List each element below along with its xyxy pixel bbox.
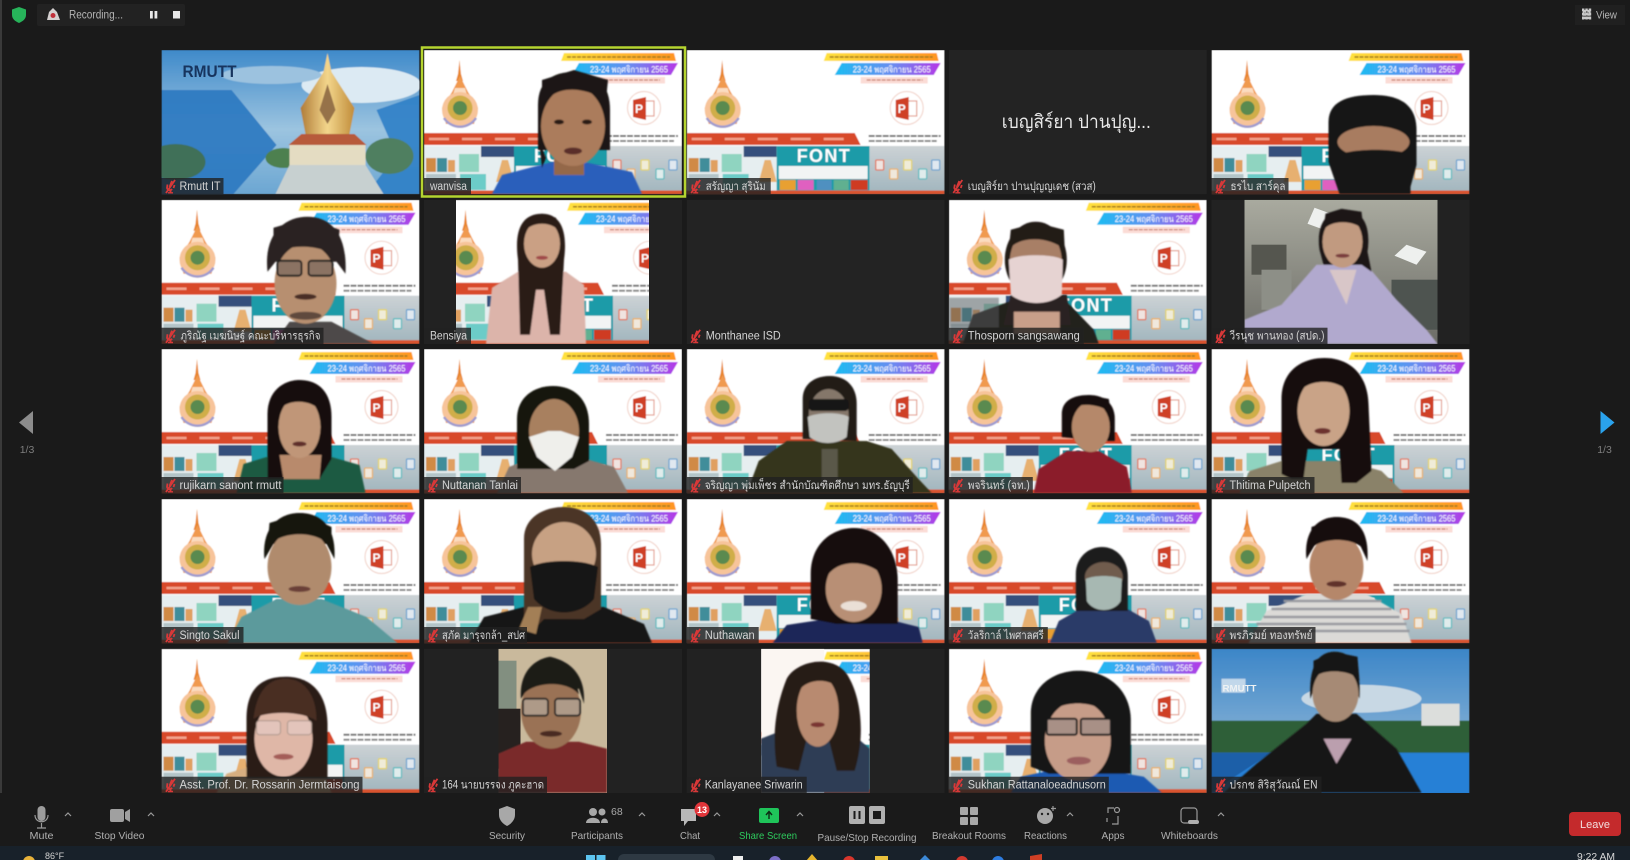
recording label: Recording... — [69, 10, 123, 22]
campus background with golden monument — [146, 50, 422, 194]
slide background — [162, 649, 420, 793]
chat button with unread badge — [680, 802, 710, 842]
name label — [949, 777, 1109, 793]
slide background — [949, 200, 1207, 344]
pillar-boxed slide and participant — [761, 648, 870, 793]
name label: ภูริณัฐ เมฆนิษฐ์ คณะบริหารธุรกิจ — [180, 329, 320, 343]
slide background — [424, 499, 682, 644]
name label — [162, 627, 244, 643]
name label: ปรกช สิริสุวัณณ์ EN — [1230, 778, 1318, 792]
name label: Monthanee ISD — [706, 331, 781, 343]
slide background — [424, 50, 682, 194]
pause and stop recording button — [818, 806, 917, 844]
tile: Thitima Pulpetch — [1212, 349, 1470, 494]
participants button: Participants — [571, 830, 623, 842]
active speaker border — [422, 48, 685, 196]
slide background — [949, 499, 1207, 644]
tile: Nuthawan — [687, 499, 945, 644]
slide background — [1212, 499, 1470, 644]
tile: Monthanee ISD — [687, 200, 945, 344]
tile: พรภิรมย์ ทองทรัพย์ — [1212, 499, 1470, 644]
name label — [1212, 178, 1288, 194]
tile: Singto Sakul — [162, 499, 420, 644]
tile: Thosporn sangsawang — [949, 200, 1207, 344]
participant: woman in pink blouse — [486, 214, 586, 344]
mute button: Mute — [30, 830, 54, 842]
participants button: 68 — [611, 806, 623, 818]
taskbar app icons — [733, 854, 1042, 860]
tile: Nuttanan Tanlai — [424, 349, 682, 494]
name label — [953, 179, 1096, 193]
participant: man in striped shirt — [1248, 517, 1412, 643]
name label: Singto Sakul — [180, 630, 240, 642]
name label: วัลริกาล์ ไพศาลศรี — [968, 628, 1044, 642]
start button — [586, 855, 606, 860]
tile: Sukhan Rattanaloeadnusorn — [949, 649, 1207, 793]
slide background — [162, 349, 420, 494]
breakout rooms button: Breakout Rooms — [932, 830, 1006, 842]
apps button: Apps — [1102, 830, 1124, 842]
pillar-boxed slide and participant — [456, 200, 649, 344]
apps button — [1102, 808, 1124, 842]
participants caret — [639, 813, 645, 816]
tile: Rmutt IT — [146, 50, 422, 194]
name label: วีรนุช พานทอง (สปด.) — [1229, 330, 1325, 343]
centered display name: เบญสิร์ยา ปานปุญ... — [1002, 111, 1151, 134]
share screen button: Share Screen — [739, 830, 797, 842]
tile: Rossarin Jermtaisong — [162, 649, 420, 793]
participant: woman in maroon shirt — [1034, 395, 1132, 493]
tile: wanvisa — [424, 50, 682, 194]
whiteboards button — [1161, 808, 1218, 842]
tile: 164 นายบรรจง ภูคะฮาด — [424, 649, 682, 793]
name label — [949, 477, 1033, 493]
unread badge: 13 — [697, 805, 707, 815]
participant: woman in lilac jacket — [1244, 209, 1438, 344]
slide background — [162, 200, 420, 344]
pause and stop controls — [150, 11, 180, 18]
tile: Bensiya — [430, 200, 649, 344]
participant: woman in black — [1224, 652, 1422, 793]
meeting toolbar — [0, 793, 1630, 846]
participant: woman with black mask — [469, 507, 652, 643]
name label: สุภัค มารุจกล้า_สปศ — [442, 629, 526, 642]
slide background — [687, 50, 945, 194]
name label — [162, 178, 224, 194]
name label: Thosporn sangsawang — [968, 331, 1080, 343]
tile: rujikarn sanont rmutt — [162, 349, 420, 494]
breakout rooms button — [932, 807, 1006, 842]
chat button with unread badge: Chat — [680, 830, 700, 842]
name label: Sukhan Rattanaloeadnusorn — [968, 780, 1106, 792]
name label — [1212, 777, 1322, 793]
name label: wanvisa — [429, 181, 468, 193]
video caret — [148, 813, 154, 816]
name label — [1212, 627, 1316, 643]
name label — [1212, 328, 1328, 344]
participant: person with black mask — [1328, 95, 1416, 194]
participant: woman with black glasses — [1011, 671, 1162, 793]
previous page arrow: 1/3 — [20, 444, 34, 456]
tile: สรัญญา สุรินัม — [687, 50, 945, 194]
name label — [687, 777, 807, 793]
participant: woman in navy jacket — [761, 662, 870, 793]
whiteboards button: Whiteboards — [1161, 830, 1218, 842]
stop video button — [94, 809, 145, 842]
participant: woman in blue — [492, 70, 642, 194]
next page arrow: 1/3 — [1597, 444, 1612, 456]
slide background — [687, 499, 945, 644]
share caret — [797, 813, 803, 816]
RMUTT logo: RMUTT — [182, 62, 237, 81]
view button — [1575, 5, 1625, 25]
tile: เบญสิร์ยา ปานปุญญเดช — [949, 50, 1207, 194]
name label: เบญสิร์ยา ปานปุญญเดช (สวส) — [968, 179, 1096, 193]
view label: View — [1596, 10, 1617, 22]
name label — [949, 328, 1084, 344]
pause and stop recording button: Pause/Stop Recording — [818, 832, 917, 844]
chat caret — [714, 813, 720, 816]
name label: Nuttanan Tanlai — [442, 480, 518, 492]
name label: พจรินทร์ (จท.) — [968, 478, 1030, 492]
leave button — [1569, 812, 1621, 836]
name label — [687, 178, 771, 194]
participant: woman with pink mask — [949, 222, 1099, 344]
participant: woman in green — [236, 380, 366, 493]
participant: man in teal polo — [228, 513, 398, 643]
name label — [424, 178, 471, 194]
name label — [1212, 477, 1314, 493]
leave button: Leave — [1580, 819, 1610, 831]
tile: Kanlayanee Sriwarin — [687, 649, 945, 793]
slide background — [424, 349, 682, 494]
whiteboards caret — [1218, 813, 1224, 816]
slide background — [949, 649, 1207, 793]
name label: Nuthawan — [705, 630, 755, 642]
mute caret — [65, 813, 71, 816]
participant: woman with white mask — [497, 386, 628, 493]
security button — [489, 806, 526, 842]
name label — [424, 477, 521, 493]
name label — [687, 477, 913, 493]
participant: smiling woman in navy — [773, 528, 923, 643]
name label — [162, 328, 324, 344]
name label: rujikarn sanont rmutt — [180, 480, 282, 492]
name label — [949, 627, 1048, 643]
name label: 164 นายบรรจง ภูคะฮาด — [442, 780, 544, 792]
security button: Security — [489, 830, 526, 842]
recording indicator — [37, 4, 185, 26]
tile: ธรไบ สาร์คุล — [1212, 50, 1470, 194]
slide background — [687, 349, 945, 494]
name label — [162, 777, 362, 793]
participant: woman with grey mask — [1050, 547, 1157, 643]
grid icon — [1582, 10, 1592, 19]
recording cloud icon — [47, 8, 60, 20]
participant: man with glasses — [267, 217, 374, 344]
name label: Thitima Pulpetch — [1230, 480, 1310, 492]
office photo with participant — [1244, 200, 1438, 344]
name label: Asst. Prof. Dr. Rossarin Jermtaisong — [180, 780, 360, 792]
search box — [618, 854, 715, 860]
mute button — [30, 806, 54, 842]
campus background — [1212, 649, 1470, 794]
participants button — [571, 806, 623, 842]
name label: Rmutt IT — [180, 181, 220, 193]
tile: พจรินทร์ — [949, 349, 1207, 494]
name label — [424, 627, 527, 643]
tile: วีรนุช พานทอง — [1215, 200, 1438, 344]
name label: ธรไบ สาร์คุล — [1230, 179, 1286, 193]
security shield icon — [12, 7, 26, 23]
slide background — [1212, 50, 1470, 194]
tile: สุภัค มารุจกล้า — [424, 499, 682, 644]
name label — [424, 777, 547, 793]
tile: จริญญา พุ่มเพ็ชร — [687, 349, 945, 494]
participant: woman in olive sweater — [1240, 358, 1404, 493]
reactions button — [1024, 806, 1067, 842]
home photo with participant — [498, 648, 607, 793]
tile: ภูริณัฐ เมฆนิษฐ์ — [162, 200, 420, 344]
name label: Kanlayanee Sriwarin — [705, 780, 803, 792]
name label: Bensiya — [430, 331, 468, 343]
weather icon and temperature — [23, 851, 65, 860]
next page arrow — [1597, 411, 1614, 456]
participant: woman with bangs — [216, 677, 332, 793]
tile: ปรกช สิริสุวัณณ์ EN — [1212, 649, 1470, 794]
name label — [162, 477, 284, 493]
participant: woman in dark jacket with mask — [747, 376, 932, 493]
slide background — [949, 349, 1207, 494]
name label: สรัญญา สุรินัม — [706, 180, 766, 193]
previous page arrow — [19, 411, 34, 456]
share screen button — [739, 808, 797, 842]
name label: จริญญา พุ่มเพ็ชร สำนักบัณฑิตศึกษา มทร.ธัญบุรี — [705, 477, 910, 492]
participant: man with glasses in maroon shirt — [498, 657, 607, 793]
slide background — [1212, 349, 1470, 494]
tile: วัลริกาล์ ไพศาลศรี — [949, 499, 1207, 644]
windows taskbar — [0, 846, 1630, 860]
RMUTT logo: RMUTT — [1222, 684, 1257, 694]
stop video button: Stop Video — [94, 830, 145, 842]
name label: พรภิรมย์ ทองทรัพย์ — [1230, 628, 1312, 642]
name label — [687, 627, 759, 643]
reactions caret — [1067, 813, 1073, 816]
reactions button: Reactions — [1024, 830, 1067, 842]
slide background — [162, 499, 420, 644]
